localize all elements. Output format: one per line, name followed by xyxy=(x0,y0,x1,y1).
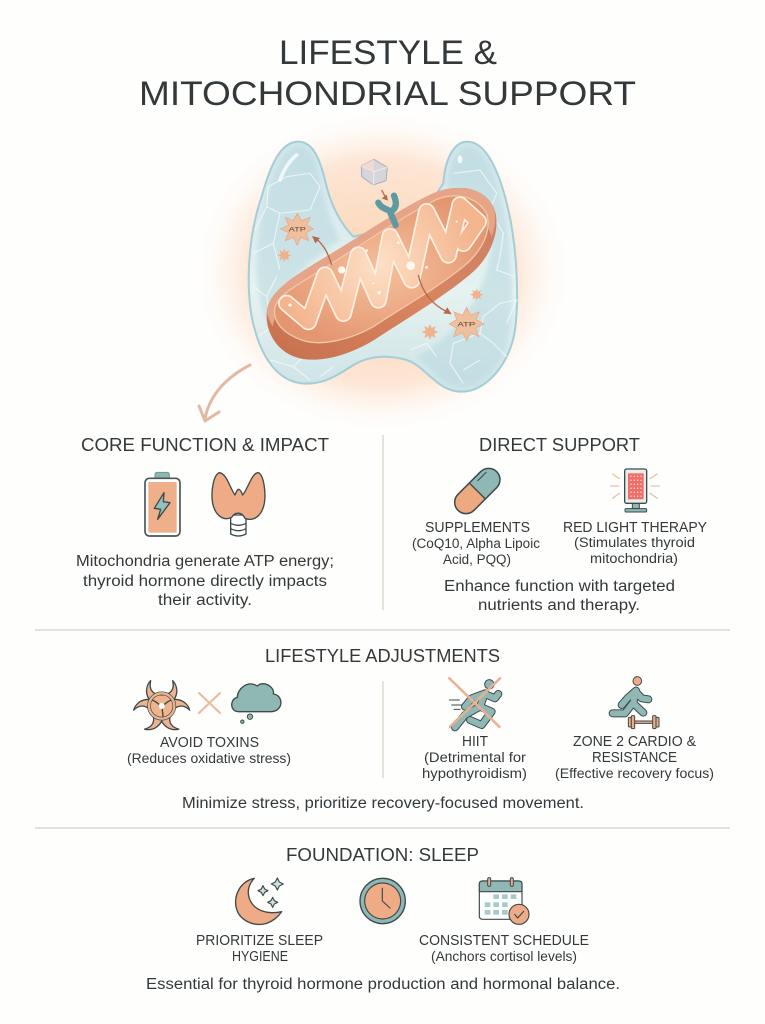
consistent schedule label: (Anchors cortisol levels) xyxy=(431,949,577,964)
avoid toxins label: AVOID TOXINS xyxy=(160,735,259,751)
internal arrows xyxy=(312,190,452,314)
panel: foundation sleep xyxy=(146,845,620,993)
supplements label xyxy=(412,520,540,567)
title xyxy=(139,34,636,113)
icon: biohazard xyxy=(132,681,192,733)
mitochondrion outer membrane xyxy=(267,188,497,360)
thyroid cell lines xyxy=(253,170,517,383)
red light therapy label: RED LIGHT THERAPY xyxy=(563,520,707,536)
title: MITOCHONDRIAL SUPPORT xyxy=(139,75,636,113)
red light therapy label xyxy=(563,520,707,566)
body text: thyroid hormone directly impacts xyxy=(83,573,327,590)
body text: their activity. xyxy=(158,592,252,609)
icon: crossed out runner xyxy=(449,678,500,727)
small particles xyxy=(277,249,483,340)
thyroid inner shading xyxy=(256,147,512,387)
hiit label xyxy=(422,734,527,781)
thyroid gloss highlights xyxy=(280,155,297,180)
illustration: thyroid and mitochondrion xyxy=(187,106,577,438)
ATP star right xyxy=(449,307,484,341)
supplements label: SUPPLEMENTS xyxy=(425,520,530,536)
heading: DIRECT SUPPORT xyxy=(479,435,640,455)
red light therapy label: (Stimulates thyroid xyxy=(574,535,695,550)
summary text: nutrients and therapy. xyxy=(478,597,640,614)
consistent schedule label xyxy=(419,933,589,964)
hiit label: (Detrimental for xyxy=(424,750,527,765)
panel: lifestyle adjustments xyxy=(127,646,714,812)
consistent schedule label: CONSISTENT SCHEDULE xyxy=(419,933,589,949)
zone 2 label: ZONE 2 CARDIO & xyxy=(573,734,696,750)
panel: direct support xyxy=(412,435,707,614)
background glow xyxy=(187,106,577,438)
curved arrow xyxy=(199,365,250,421)
receptor xyxy=(378,196,396,225)
body text: Mitochondria generate ATP energy; xyxy=(76,553,334,570)
icon: runner with dumbbell xyxy=(613,677,659,729)
ATP star left xyxy=(281,213,313,245)
heading: LIFESTYLE ADJUSTMENTS xyxy=(265,646,500,666)
icon: stress cloud xyxy=(232,684,281,723)
thyroid gland and mitochondrion detail xyxy=(249,142,517,392)
body text xyxy=(76,553,334,609)
hormone crystal xyxy=(361,159,387,185)
title: LIFESTYLE & xyxy=(279,34,497,72)
cristae folds xyxy=(287,205,478,322)
icon: thyroid xyxy=(212,473,265,536)
zone 2 label xyxy=(555,734,714,781)
matrix sparkles xyxy=(288,221,458,307)
heading: FOUNDATION: SLEEP xyxy=(286,845,479,865)
icon: red light panel xyxy=(611,469,659,512)
avoid toxins label xyxy=(127,735,291,766)
supplements label: Acid, PQQ) xyxy=(443,552,511,567)
zone 2 label: (Effective recovery focus) xyxy=(555,766,714,781)
summary text xyxy=(444,578,675,614)
supplements label: (CoQ10, Alpha Lipoic xyxy=(412,536,540,551)
summary text: Enhance function with targeted xyxy=(444,578,675,595)
icon: battery xyxy=(145,472,180,536)
ATP star left: ATP xyxy=(289,227,307,234)
panel: core function and impact xyxy=(76,435,334,609)
ATP star right: ATP xyxy=(457,322,476,329)
prioritize sleep label: HYGIENE xyxy=(232,949,288,965)
mitochondrion inner chamber xyxy=(274,196,488,343)
icon: clock xyxy=(360,878,405,924)
icon: calendar xyxy=(479,878,529,924)
dividers xyxy=(35,435,730,828)
prioritize sleep label xyxy=(196,933,323,965)
icon: capsule xyxy=(450,464,505,518)
zone 2 label: RESISTANCE xyxy=(592,750,677,766)
prioritize sleep label: PRIORITIZE SLEEP xyxy=(196,933,323,949)
heading: CORE FUNCTION & IMPACT xyxy=(81,435,329,455)
red light therapy label: mitochondria) xyxy=(590,551,678,566)
icon: moon and stars xyxy=(236,878,283,924)
avoid toxins label: (Reduces oxidative stress) xyxy=(127,751,291,766)
hiit label: hypothyroidism) xyxy=(422,766,527,781)
hiit label: HIIT xyxy=(462,734,488,750)
icon: cross xyxy=(199,693,220,713)
thyroid lobes xyxy=(249,142,517,392)
summary text: Essential for thyroid hormone production and hormonal balance. xyxy=(146,976,620,993)
summary text: Minimize stress, prioritize recovery-focused movement. xyxy=(182,795,584,812)
